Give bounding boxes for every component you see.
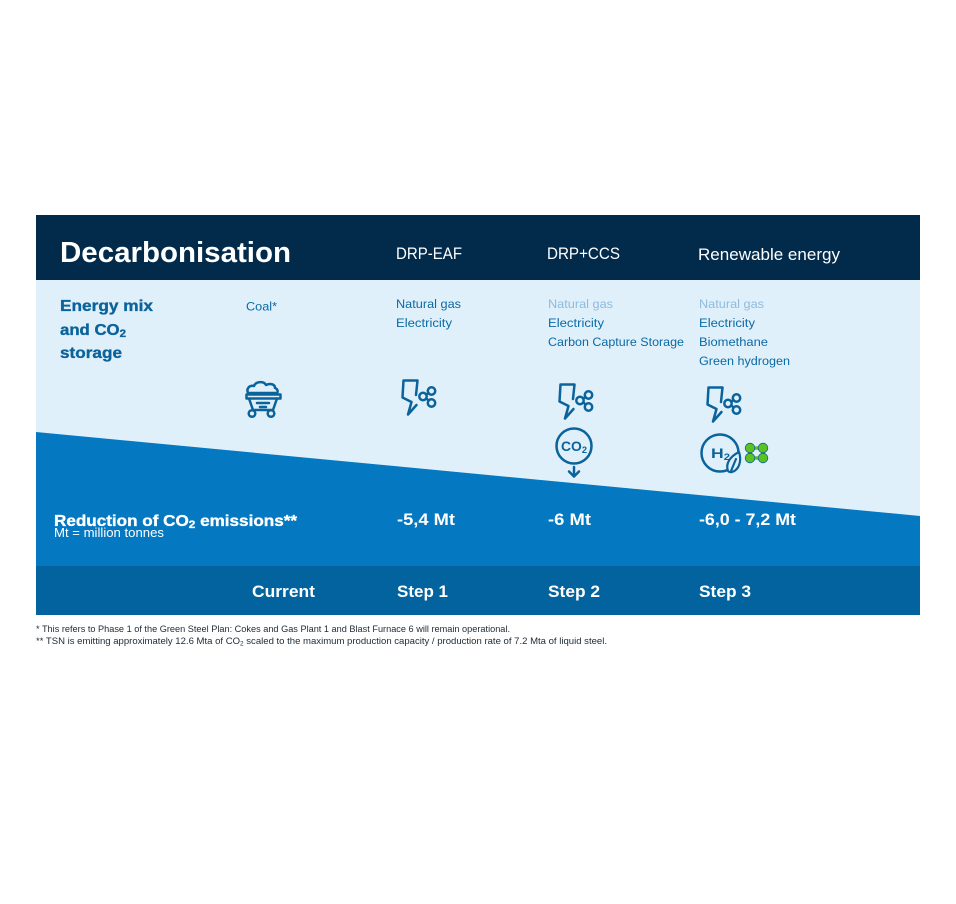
value: step 2 reduction: -6 Mt (548, 510, 591, 529)
icon: CO2 storage: 2 (582, 445, 587, 455)
heading: energy mix and CO2 storage: 2 (120, 328, 126, 340)
column heading: DRP+CCS: DRP+CCS (547, 245, 620, 263)
text: step 1 energy mix (396, 297, 461, 330)
column heading: Renewable energy: Renewable energy (698, 246, 841, 264)
icon: coal cart (246, 382, 280, 417)
label: reduction of CO2 emissions: emissions** (195, 513, 298, 530)
icon: CO2 storage (556, 428, 592, 476)
heading: energy mix and CO2 storage (60, 298, 153, 362)
footnotes: * This refers to Phase 1 of the Green Steel Plan: Cokes and Gas Plant 1 and Blast Furnace 6 will remain operational. (36, 624, 510, 634)
label: step 1: Step 1 (397, 582, 448, 601)
icon: electricity step 1 (402, 380, 435, 414)
title: Decarbonisation (60, 237, 291, 269)
icon: electricity step 2 (560, 384, 592, 418)
text: step 2 energy mix: Electricity (548, 316, 605, 330)
text: step 3 energy mix: Electricity (699, 316, 756, 330)
label: reduction of CO2 emissions: Reduction of CO (54, 513, 180, 530)
column heading: DRP-EAF: DRP-EAF (396, 245, 462, 263)
footnotes: 2 (240, 642, 244, 648)
text: step 1 energy mix: Natural gas (396, 297, 461, 311)
label: reduction of CO2 emissions: 2 (189, 519, 195, 531)
label: reduction of CO2 emissions (54, 513, 298, 540)
icon: CO2 storage: CO (561, 439, 581, 454)
text: step 3 energy mix: Natural gas (699, 297, 764, 311)
label: reduction of CO2 emissions: Mt = million tonnes (54, 526, 164, 540)
panel: header bar (36, 215, 920, 280)
text: current energy mix: Coal* (246, 300, 277, 314)
text: step 1 energy mix: Electricity (396, 316, 453, 330)
heading: energy mix and CO2 storage: Energy mix (60, 298, 153, 315)
footnotes: scaled to the maximum production capacity / production rate of 7.2 Mta of liquid steel. (244, 636, 607, 646)
panel: CO2 reduction wedge (36, 432, 920, 567)
label: step 2: Step 2 (548, 582, 600, 601)
icon: green hydrogen (702, 434, 740, 472)
icon: green hydrogen: 2 (724, 452, 730, 462)
text: step 3 energy mix (699, 297, 790, 368)
icon: green hydrogen: H (711, 445, 721, 461)
text: step 3 energy mix: Green hydrogen (699, 354, 790, 368)
icon: electricity step 3 (708, 388, 740, 422)
heading: energy mix and CO2 storage: and CO (60, 322, 117, 339)
panel: energy mix background (36, 280, 920, 520)
value: step 1 reduction: -5,4 Mt (397, 510, 455, 529)
footnotes: ** TSN is emitting approximately 12.6 Mta of CO (36, 636, 224, 646)
label: current: Current (252, 582, 315, 601)
text: step 2 energy mix: Natural gas (548, 297, 613, 311)
heading: energy mix and CO2 storage: storage (60, 345, 122, 362)
text: step 2 energy mix (548, 297, 684, 349)
label: step 3: Step 3 (699, 582, 751, 601)
text: step 3 energy mix: Biomethane (699, 335, 768, 349)
panel: step bar (36, 566, 920, 615)
icon: biomethane molecule (745, 443, 768, 463)
value: step 3 reduction: -6,0 - 7,2 Mt (699, 510, 796, 529)
text: step 2 energy mix: Carbon Capture Storage (548, 335, 684, 349)
footnotes (36, 624, 607, 648)
